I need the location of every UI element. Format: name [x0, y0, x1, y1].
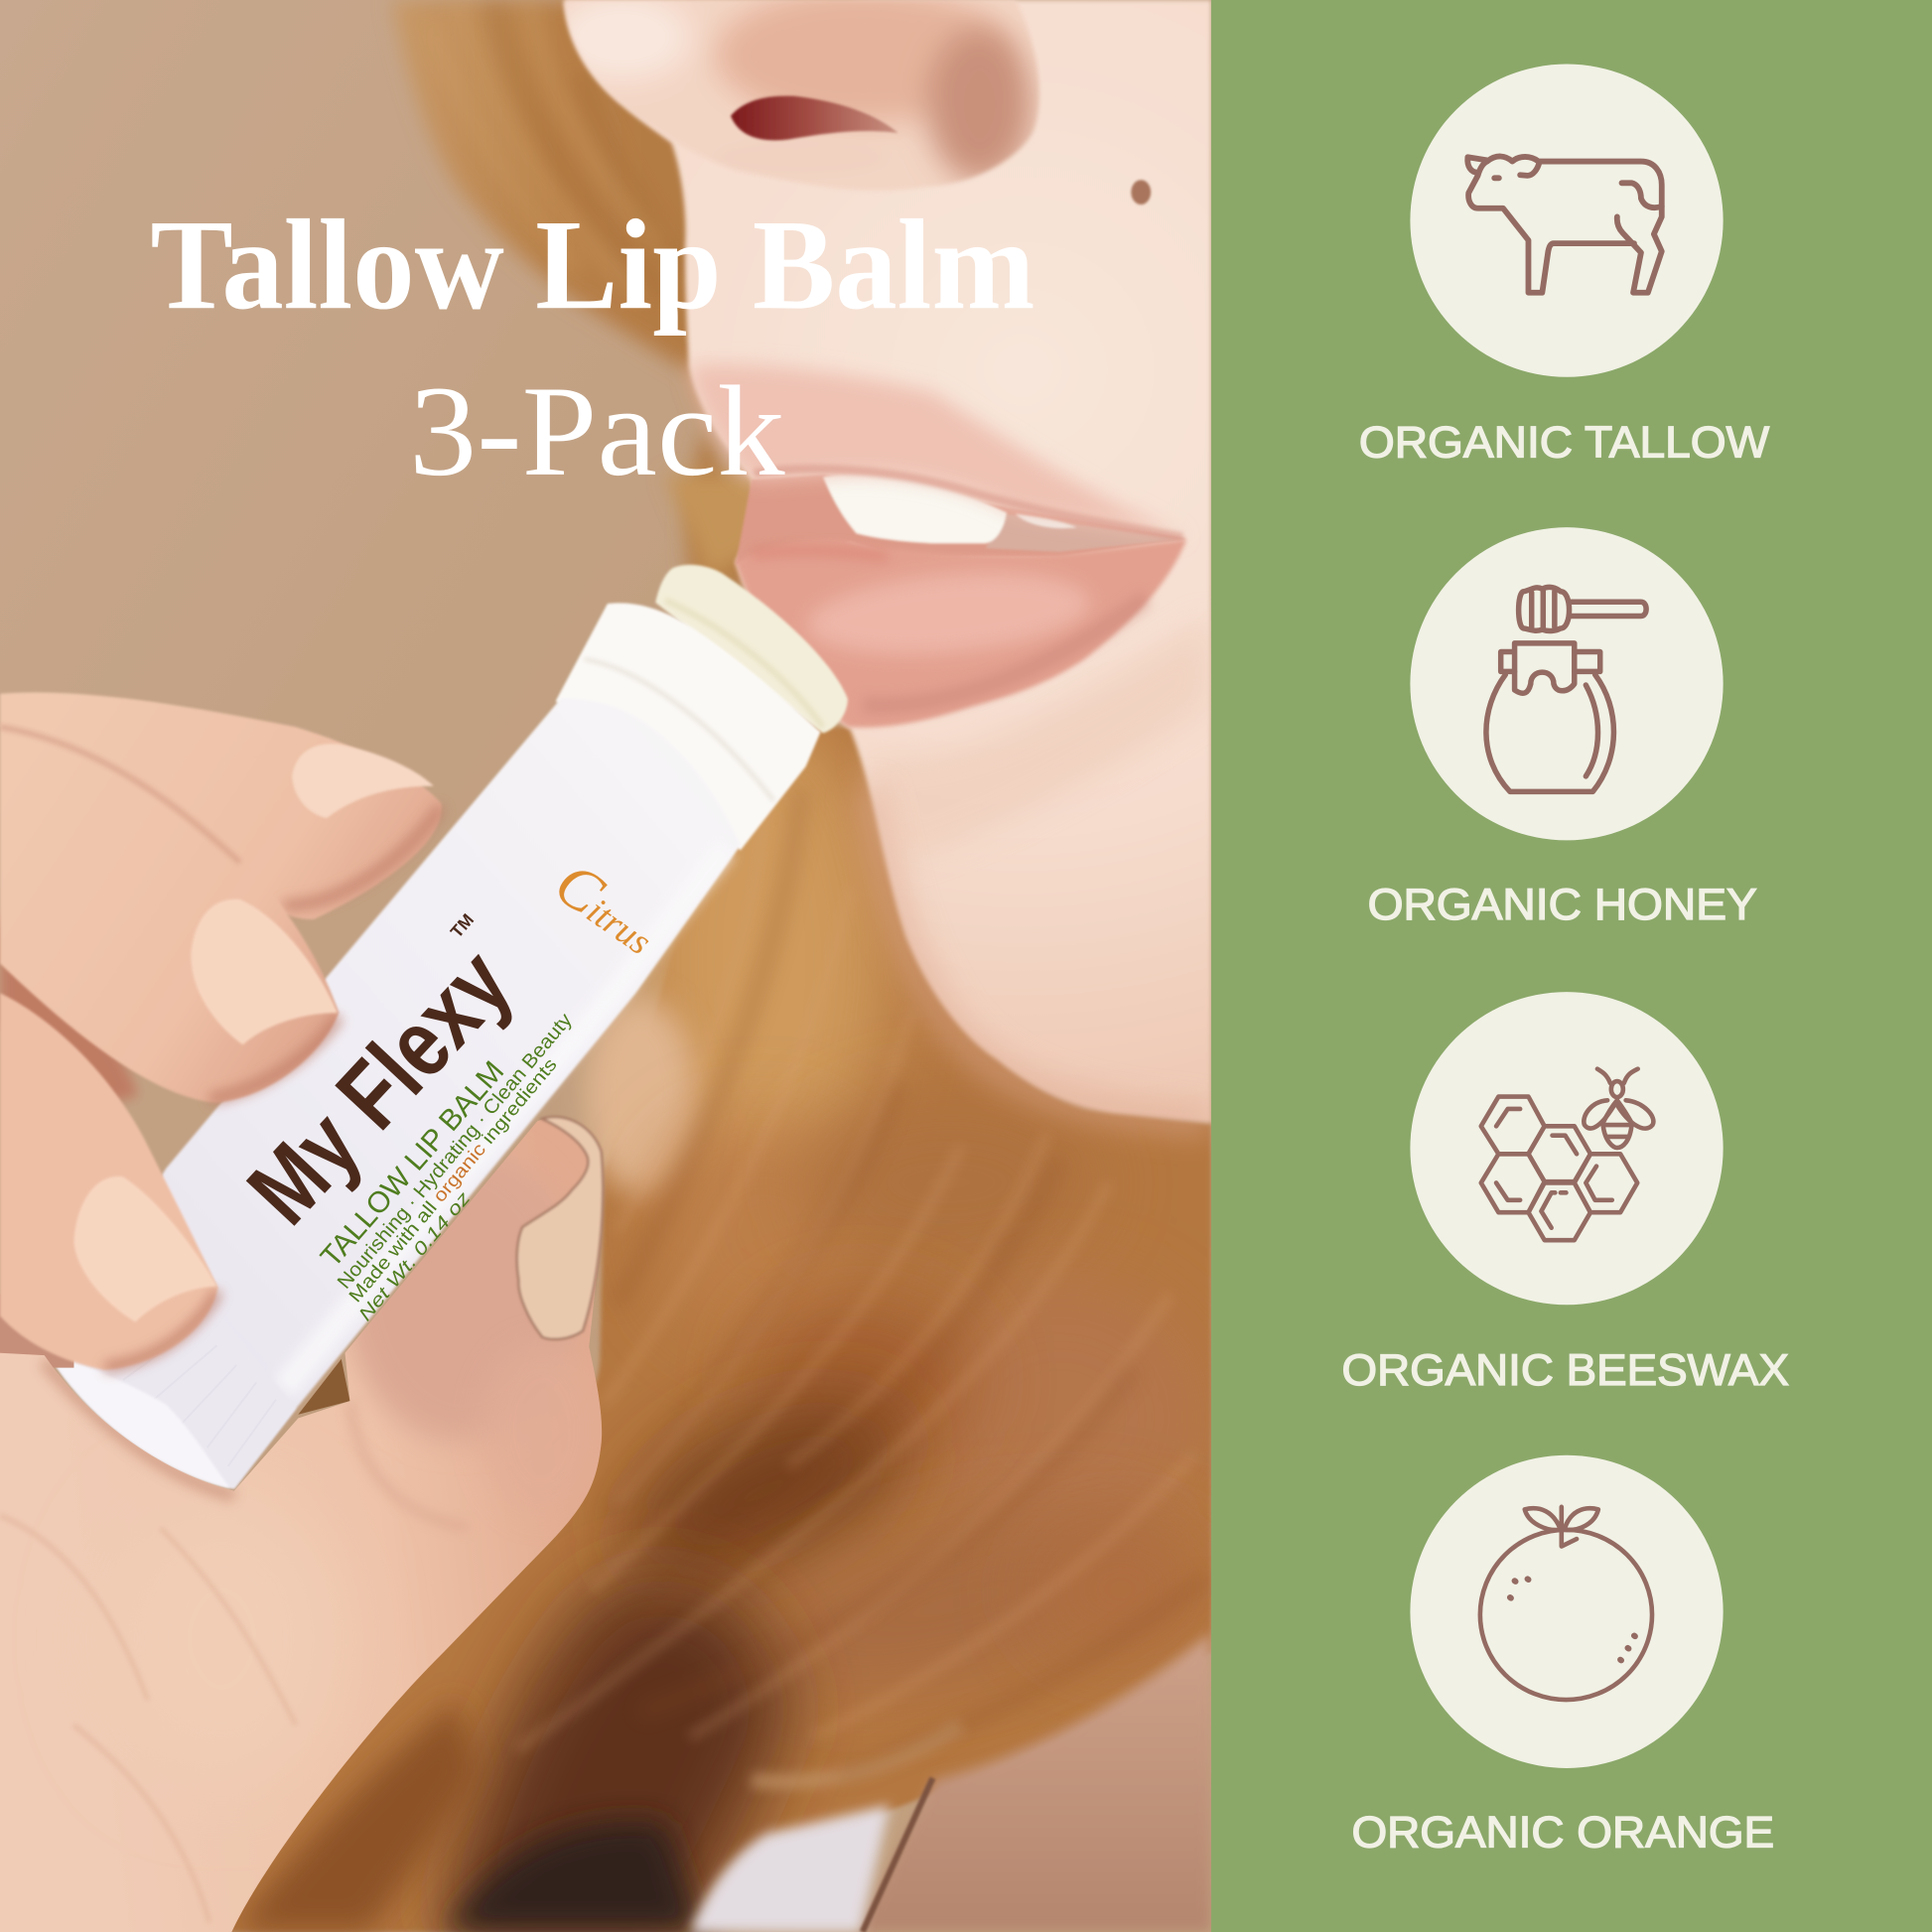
index finger: [0, 692, 442, 919]
net weight on tube: Net Wt. 0.14 oz: [354, 1187, 475, 1324]
thumb nail: [517, 1117, 603, 1339]
shadow between fingers: [0, 911, 138, 1109]
label: ORGANIC HONEY: [1368, 881, 1757, 929]
mole: [1131, 180, 1151, 205]
ingredient: organic honey: [1368, 527, 1757, 929]
shadow under ring finger: [0, 1294, 73, 1368]
mouth: [689, 364, 1186, 728]
label: ORGANIC ORANGE: [1351, 1808, 1774, 1857]
photo backdrop: [0, 0, 1211, 1932]
title line 1: Tallow Lip Balm: [150, 194, 1035, 337]
ribbed base: [48, 1311, 296, 1488]
trademark: TM: [447, 909, 478, 941]
tube end: [48, 1353, 230, 1488]
claims on tube: Nourishing · Hydrating · Clean Beauty: [334, 1010, 577, 1294]
upper lip: [689, 364, 1186, 538]
lower hair: [173, 715, 1211, 1932]
upper hair: [389, 0, 751, 588]
ingredient: organic tallow: [1359, 65, 1769, 467]
face: [542, 0, 1211, 1123]
flavor name on tube: Citrus: [543, 850, 671, 967]
label: ORGANIC TALLOW: [1359, 418, 1769, 467]
top strap: [863, 1778, 932, 1932]
gap behind thumb: [298, 1359, 349, 1415]
teeth: [823, 474, 1007, 543]
panel: product photo: [0, 0, 1211, 1932]
balm stick: [655, 565, 848, 733]
index nail: [292, 744, 434, 818]
icon: cow: [1467, 156, 1662, 293]
ingredient: organic beeswax: [1342, 992, 1789, 1395]
middle nail: [191, 899, 338, 1044]
ingredient: organic orange: [1351, 1455, 1774, 1857]
nose: [562, 0, 1040, 191]
title line 2: 3-Pack: [409, 360, 785, 503]
ingredients line on tube: Made with all organic ingredients: [345, 1054, 561, 1307]
panel: ingredients: [1211, 0, 1932, 1932]
chin shading: [856, 633, 1207, 848]
shoulder skin: [858, 1632, 1211, 1932]
label: ORGANIC BEESWAX: [1342, 1346, 1789, 1395]
hair strands: [518, 1247, 960, 1751]
lip balm tube: [48, 565, 848, 1488]
product name on tube: TALLOW LIP BALM: [315, 1055, 510, 1274]
icon: honeycomb and bee: [1481, 1069, 1653, 1240]
lower lip: [736, 539, 1186, 728]
tube body: [48, 699, 741, 1488]
icon: orange: [1480, 1507, 1652, 1700]
middle finger: [0, 725, 339, 1103]
inner collar: [556, 603, 821, 850]
hand: [0, 692, 617, 1932]
mouth interior: [736, 475, 1186, 564]
white top: [690, 1805, 890, 1932]
palm and thumb: [0, 1084, 617, 1932]
ring nail: [73, 1176, 216, 1322]
title: [150, 194, 1035, 503]
tube logo: My Flexy: [227, 928, 531, 1244]
nostril: [731, 96, 898, 140]
ring finger: [0, 993, 218, 1370]
icon: honey jar and dipper: [1486, 587, 1646, 791]
